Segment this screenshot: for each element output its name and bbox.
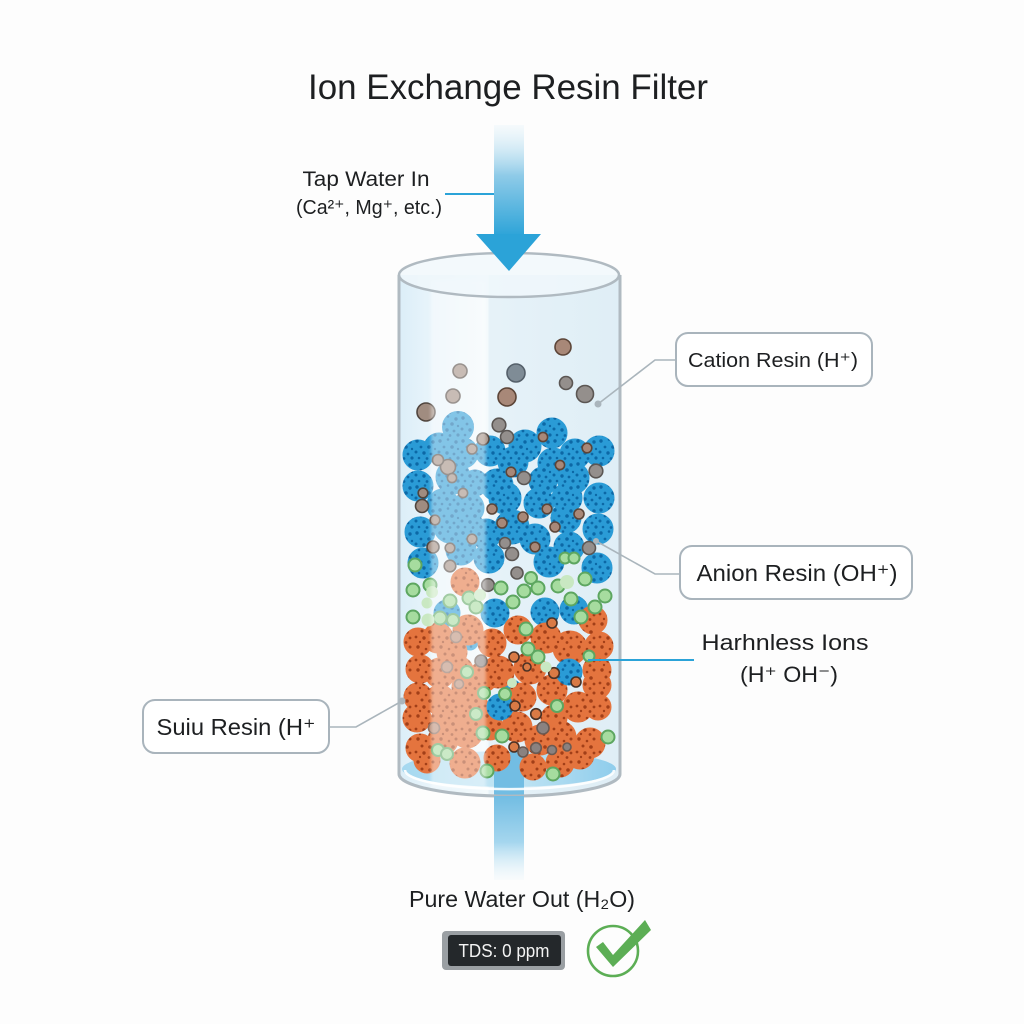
cylinder walls bbox=[399, 275, 620, 796]
dissolved grey and brown ions bbox=[416, 339, 603, 757]
inlet label: Tap Water In: (Ca²⁺, Mg⁺, etc.) bbox=[296, 197, 442, 219]
panel: resin column bbox=[399, 253, 620, 796]
outlet label: Pure Water Out (H₂O) bbox=[409, 886, 635, 912]
inlet label: Tap Water In bbox=[296, 168, 495, 219]
callout: Cation Resin: Cation Resin (H⁺) bbox=[688, 350, 858, 372]
inlet label: Tap Water In: Tap Water In bbox=[302, 168, 430, 191]
callout: Suiu Resin: Suiu Resin (H⁺ bbox=[156, 714, 316, 740]
harmless green ions bbox=[406, 552, 614, 780]
callout: Harmless Ions: (H⁺ OH⁻) bbox=[740, 662, 838, 687]
title: Ion Exchange Resin Filter bbox=[308, 68, 708, 107]
pale green ions bbox=[422, 575, 574, 688]
callout: Harmless Ions: Harhnless Ions bbox=[702, 630, 868, 655]
icon: green check mark bbox=[588, 920, 651, 976]
callout: Anion Resin: Anion Resin (OH⁺) bbox=[696, 560, 898, 586]
callout: Anion Resin bbox=[593, 538, 912, 599]
TDS badge bbox=[442, 931, 565, 970]
blue resin in harmless zone bbox=[488, 660, 581, 719]
outlet stream inside column bbox=[494, 752, 524, 796]
TDS badge: TDS: 0 ppm bbox=[458, 941, 550, 961]
arrow head bbox=[476, 234, 541, 271]
cylinder top rim bbox=[399, 253, 619, 297]
inlet stream bbox=[494, 125, 524, 237]
orange resin beads bbox=[404, 569, 612, 779]
callout: Harmless Ions bbox=[588, 630, 868, 687]
cylinder body bbox=[399, 275, 620, 796]
outlet stream bbox=[494, 796, 524, 880]
water pool at the bottom bbox=[402, 751, 616, 787]
glass reflection band bbox=[431, 280, 486, 788]
blue resin beads bbox=[404, 412, 613, 712]
callout: Cation Resin bbox=[594, 333, 872, 408]
callout: Suiu Resin bbox=[143, 698, 406, 753]
